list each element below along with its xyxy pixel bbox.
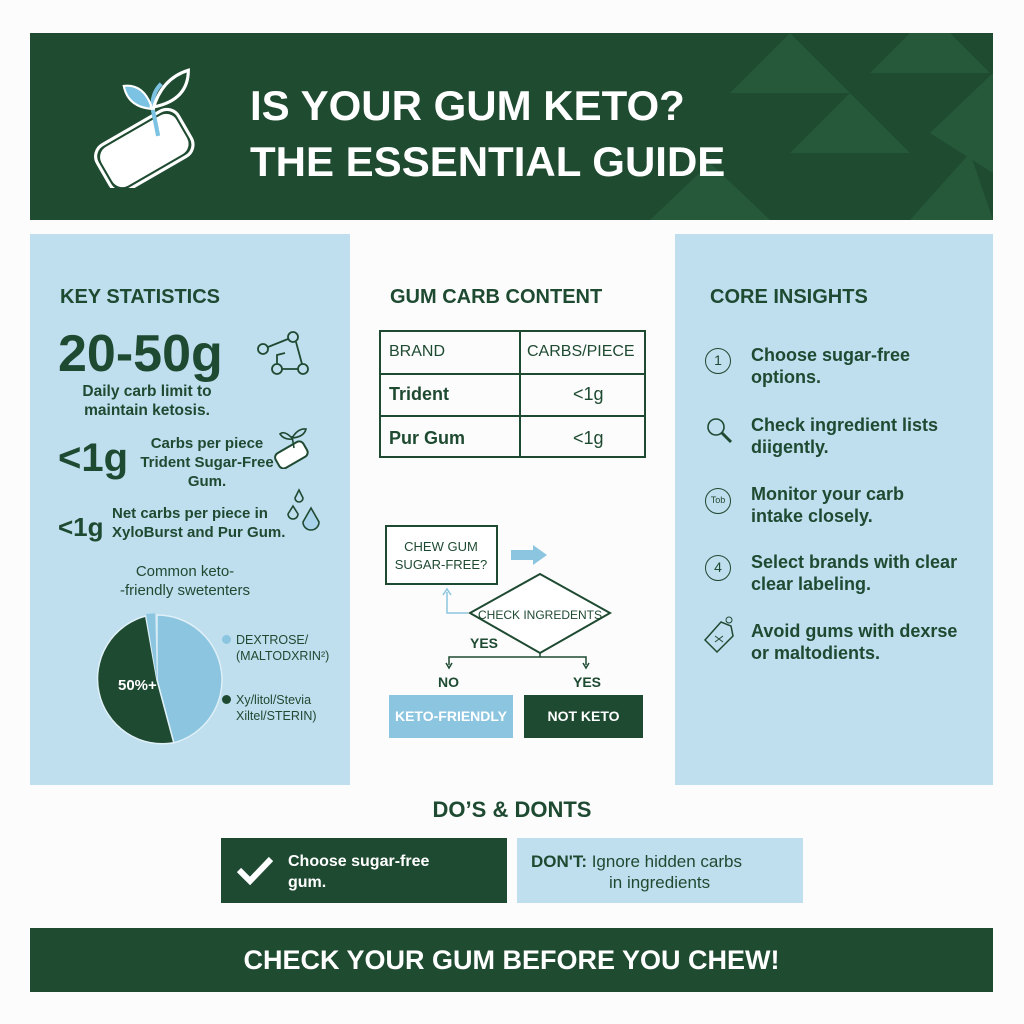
panel: core insights: Tob — [711, 495, 725, 505]
insight 4 — [751, 552, 957, 594]
panel: key statistics: Net carbs per piece in — [112, 505, 268, 522]
heading: key statistics: KEY STATISTICS — [60, 286, 220, 308]
panel: key statistics: <1g — [58, 512, 104, 542]
pie legend: Xiltel/STERIN) — [236, 709, 317, 723]
don't box — [517, 838, 803, 903]
don't box: in ingredients — [609, 873, 710, 892]
icon: gum with sprout — [94, 68, 195, 188]
title — [250, 82, 725, 185]
insight 2 — [751, 415, 938, 457]
flowchart: YES — [470, 635, 498, 651]
don't box: DON'T: Ignore hidden carbs — [531, 852, 742, 871]
insight 3: intake closely. — [751, 506, 873, 526]
panel: core insights: 4 — [714, 559, 722, 575]
insight 5 — [751, 621, 957, 663]
insight 4: clear labeling. — [751, 574, 871, 594]
panel: core insights: 1 — [714, 352, 722, 368]
panel: key statistics: Carbs per piece Trident Sugar-Free Gum. — [140, 435, 274, 490]
table: carbs per piece: CARBS/PIECE — [527, 343, 635, 360]
stat 20-50g: Daily carb limit to maintain ketosis. — [82, 383, 212, 419]
title: IS YOUR GUM KETO? — [250, 82, 685, 129]
do box — [221, 838, 507, 903]
box: keto-friendly: KETO-FRIENDLY — [395, 708, 507, 724]
pie legend: (MALTODXRIN²) — [236, 649, 329, 663]
box: not keto — [524, 695, 643, 738]
flowchart: YES — [573, 674, 601, 690]
box: not keto: NOT KETO — [547, 708, 620, 724]
table: carbs per piece: Trident — [389, 384, 449, 404]
insight 2: Check ingredient lists — [751, 415, 938, 435]
flowchart — [385, 525, 643, 738]
pie legend: Xy/litol/Stevia — [236, 693, 311, 707]
table: carbs per piece: <1g — [573, 384, 604, 404]
flowchart: CHEW GUM — [404, 539, 478, 554]
pie chart caption: -friendly swetenters — [120, 582, 250, 599]
footer banner: CHECK YOUR GUM BEFORE YOU CHEW! — [243, 945, 780, 975]
insight 1: Choose sugar-free — [751, 345, 910, 365]
icon: water drops — [287, 488, 320, 531]
insight 1: options. — [751, 367, 821, 387]
stat <1g trident — [58, 435, 274, 490]
flowchart: NO — [438, 674, 459, 690]
pie chart caption — [120, 563, 250, 599]
pie chart — [96, 614, 223, 744]
insight 2: diigently. — [751, 437, 829, 457]
do box: gum. — [288, 874, 326, 891]
insight 5: or maltodients. — [751, 643, 880, 663]
heading: do's & donts: DO’S & DONTS — [433, 797, 591, 822]
heading: gum carb content: GUM CARB CONTENT — [390, 286, 602, 308]
icon: gum sprout small — [274, 428, 309, 469]
box: keto-friendly — [389, 695, 513, 738]
stat 20-50g — [58, 325, 223, 419]
insight 3: Monitor your carb — [751, 484, 904, 504]
insight 3 — [751, 484, 904, 526]
panel: key statistics — [30, 234, 350, 785]
insight 1 — [751, 345, 910, 387]
pie chart: 50%+ — [118, 677, 157, 694]
pie chart caption: Common keto- — [136, 563, 234, 580]
icon: molecule — [257, 331, 309, 375]
table: carbs per piece: BRAND — [389, 343, 445, 360]
panel: key statistics: XyloBurst and Pur Gum. — [112, 524, 285, 541]
insight 4: Select brands with clear — [751, 552, 957, 572]
panel: key statistics: <1g — [58, 436, 128, 480]
table: carbs per piece: <1g — [573, 428, 604, 448]
do box: Choose sugar-free — [288, 853, 429, 870]
panel: core insights — [675, 234, 993, 785]
footer banner — [30, 928, 993, 992]
heading: core insights: CORE INSIGHTS — [710, 286, 868, 308]
title: THE ESSENTIAL GUIDE — [250, 138, 725, 185]
flowchart: SUGAR-FREE? — [395, 557, 487, 572]
insight 5: Avoid gums with dexrse — [751, 621, 957, 641]
pie legend — [222, 633, 329, 723]
header banner — [30, 33, 993, 220]
table: carbs per piece: Pur Gum — [389, 428, 465, 448]
stat 20-50g: 20-50g — [58, 325, 223, 383]
flowchart: CHECK INGREDENTS — [478, 608, 602, 622]
table: carbs per piece — [379, 330, 646, 458]
pie legend: DEXTROSE/ — [236, 633, 308, 647]
stat <1g xyloburst — [58, 505, 285, 542]
